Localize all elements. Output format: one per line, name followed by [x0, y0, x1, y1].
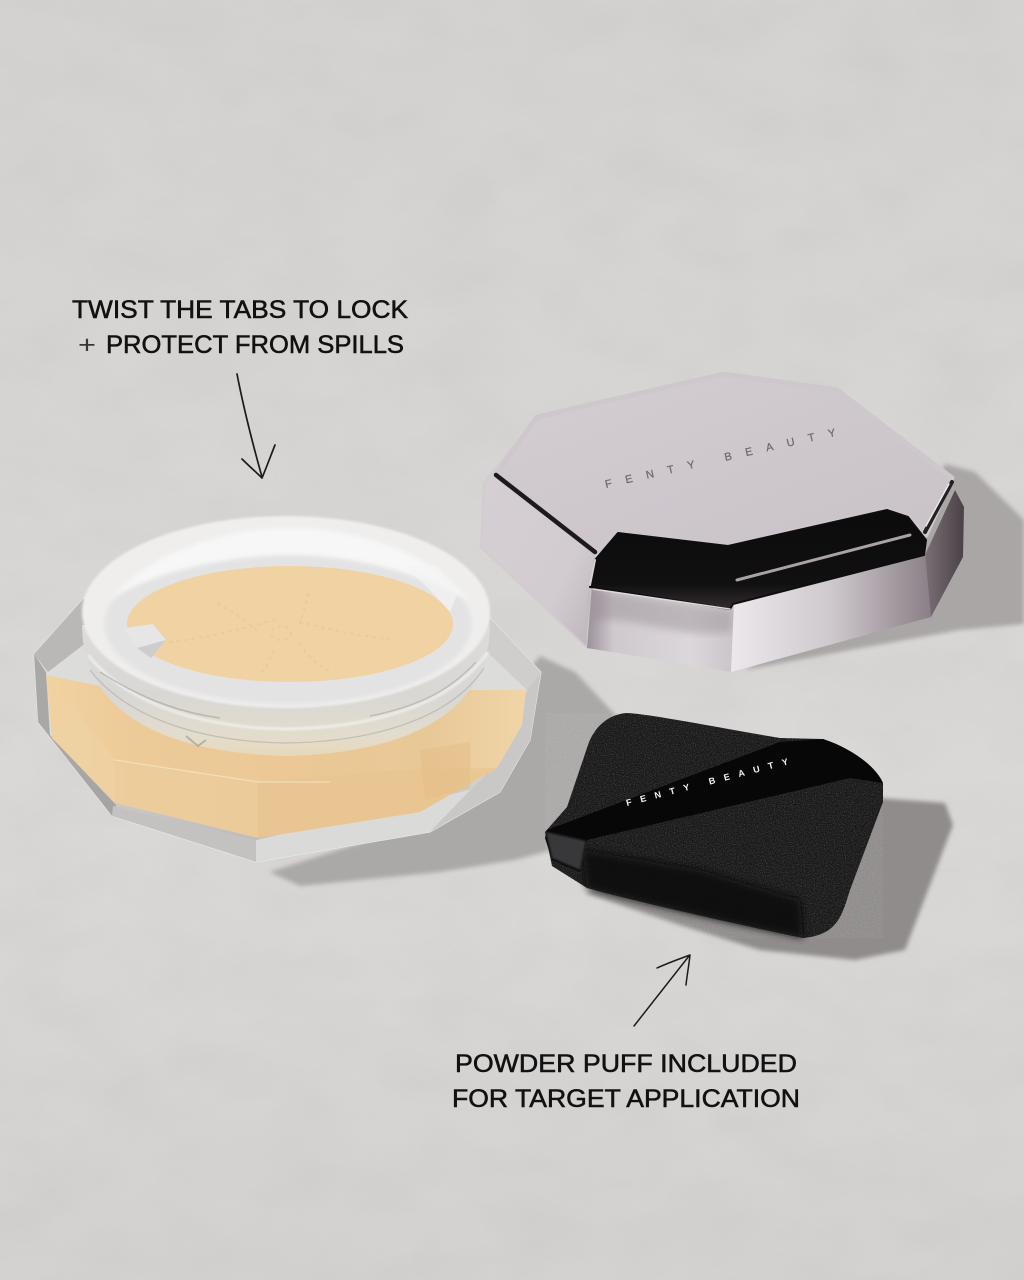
- jar of powder: [34, 516, 541, 862]
- caption: powder puff: [452, 1050, 800, 1113]
- puff: satin ribbon: [545, 739, 883, 872]
- jar: rim: [82, 516, 490, 708]
- lid: left wall: [481, 417, 597, 648]
- jar: twist tab: [123, 624, 166, 658]
- jar: powder surface: [127, 566, 453, 682]
- heading: twist the tabs: TWIST THE TABS TO LOCK: [72, 296, 408, 324]
- arrow: pointing to puff: [634, 955, 690, 1026]
- powder puff: [545, 713, 883, 938]
- jar: glass base: [34, 560, 541, 862]
- puff: velvet body: [545, 713, 883, 938]
- heading: twist the tabs: PROTECT FROM SPILLS: [106, 331, 404, 359]
- arrow: pointing to jar tabs: [237, 374, 275, 478]
- puff: brand text: FENTY BEAUTY: [625, 756, 789, 808]
- jar: clear collar: [82, 625, 490, 756]
- caption: powder puff: POWDER PUFF INCLUDED: [455, 1050, 797, 1078]
- shadow: puff: [585, 798, 953, 960]
- jar: powder band: [46, 675, 526, 838]
- shadow: jar: [270, 656, 622, 886]
- lid: chrome highlights: [496, 475, 952, 609]
- lid: front wall: [587, 585, 734, 672]
- heading: twist the tabs: +: [78, 331, 96, 359]
- lid: right wall: [925, 490, 964, 617]
- lid: right front wall: [731, 555, 931, 672]
- shadow: lid: [745, 464, 1024, 670]
- heading: twist the tabs: [72, 296, 408, 359]
- lid: top face: [496, 374, 952, 552]
- jar: embossed star logo: [170, 594, 395, 672]
- lid of jar: [481, 374, 964, 672]
- caption: powder puff: FOR TARGET APPLICATION: [452, 1085, 800, 1113]
- lid: brand text: FENTY BEAUTY: [604, 427, 837, 491]
- lid: chrome band: [590, 510, 926, 609]
